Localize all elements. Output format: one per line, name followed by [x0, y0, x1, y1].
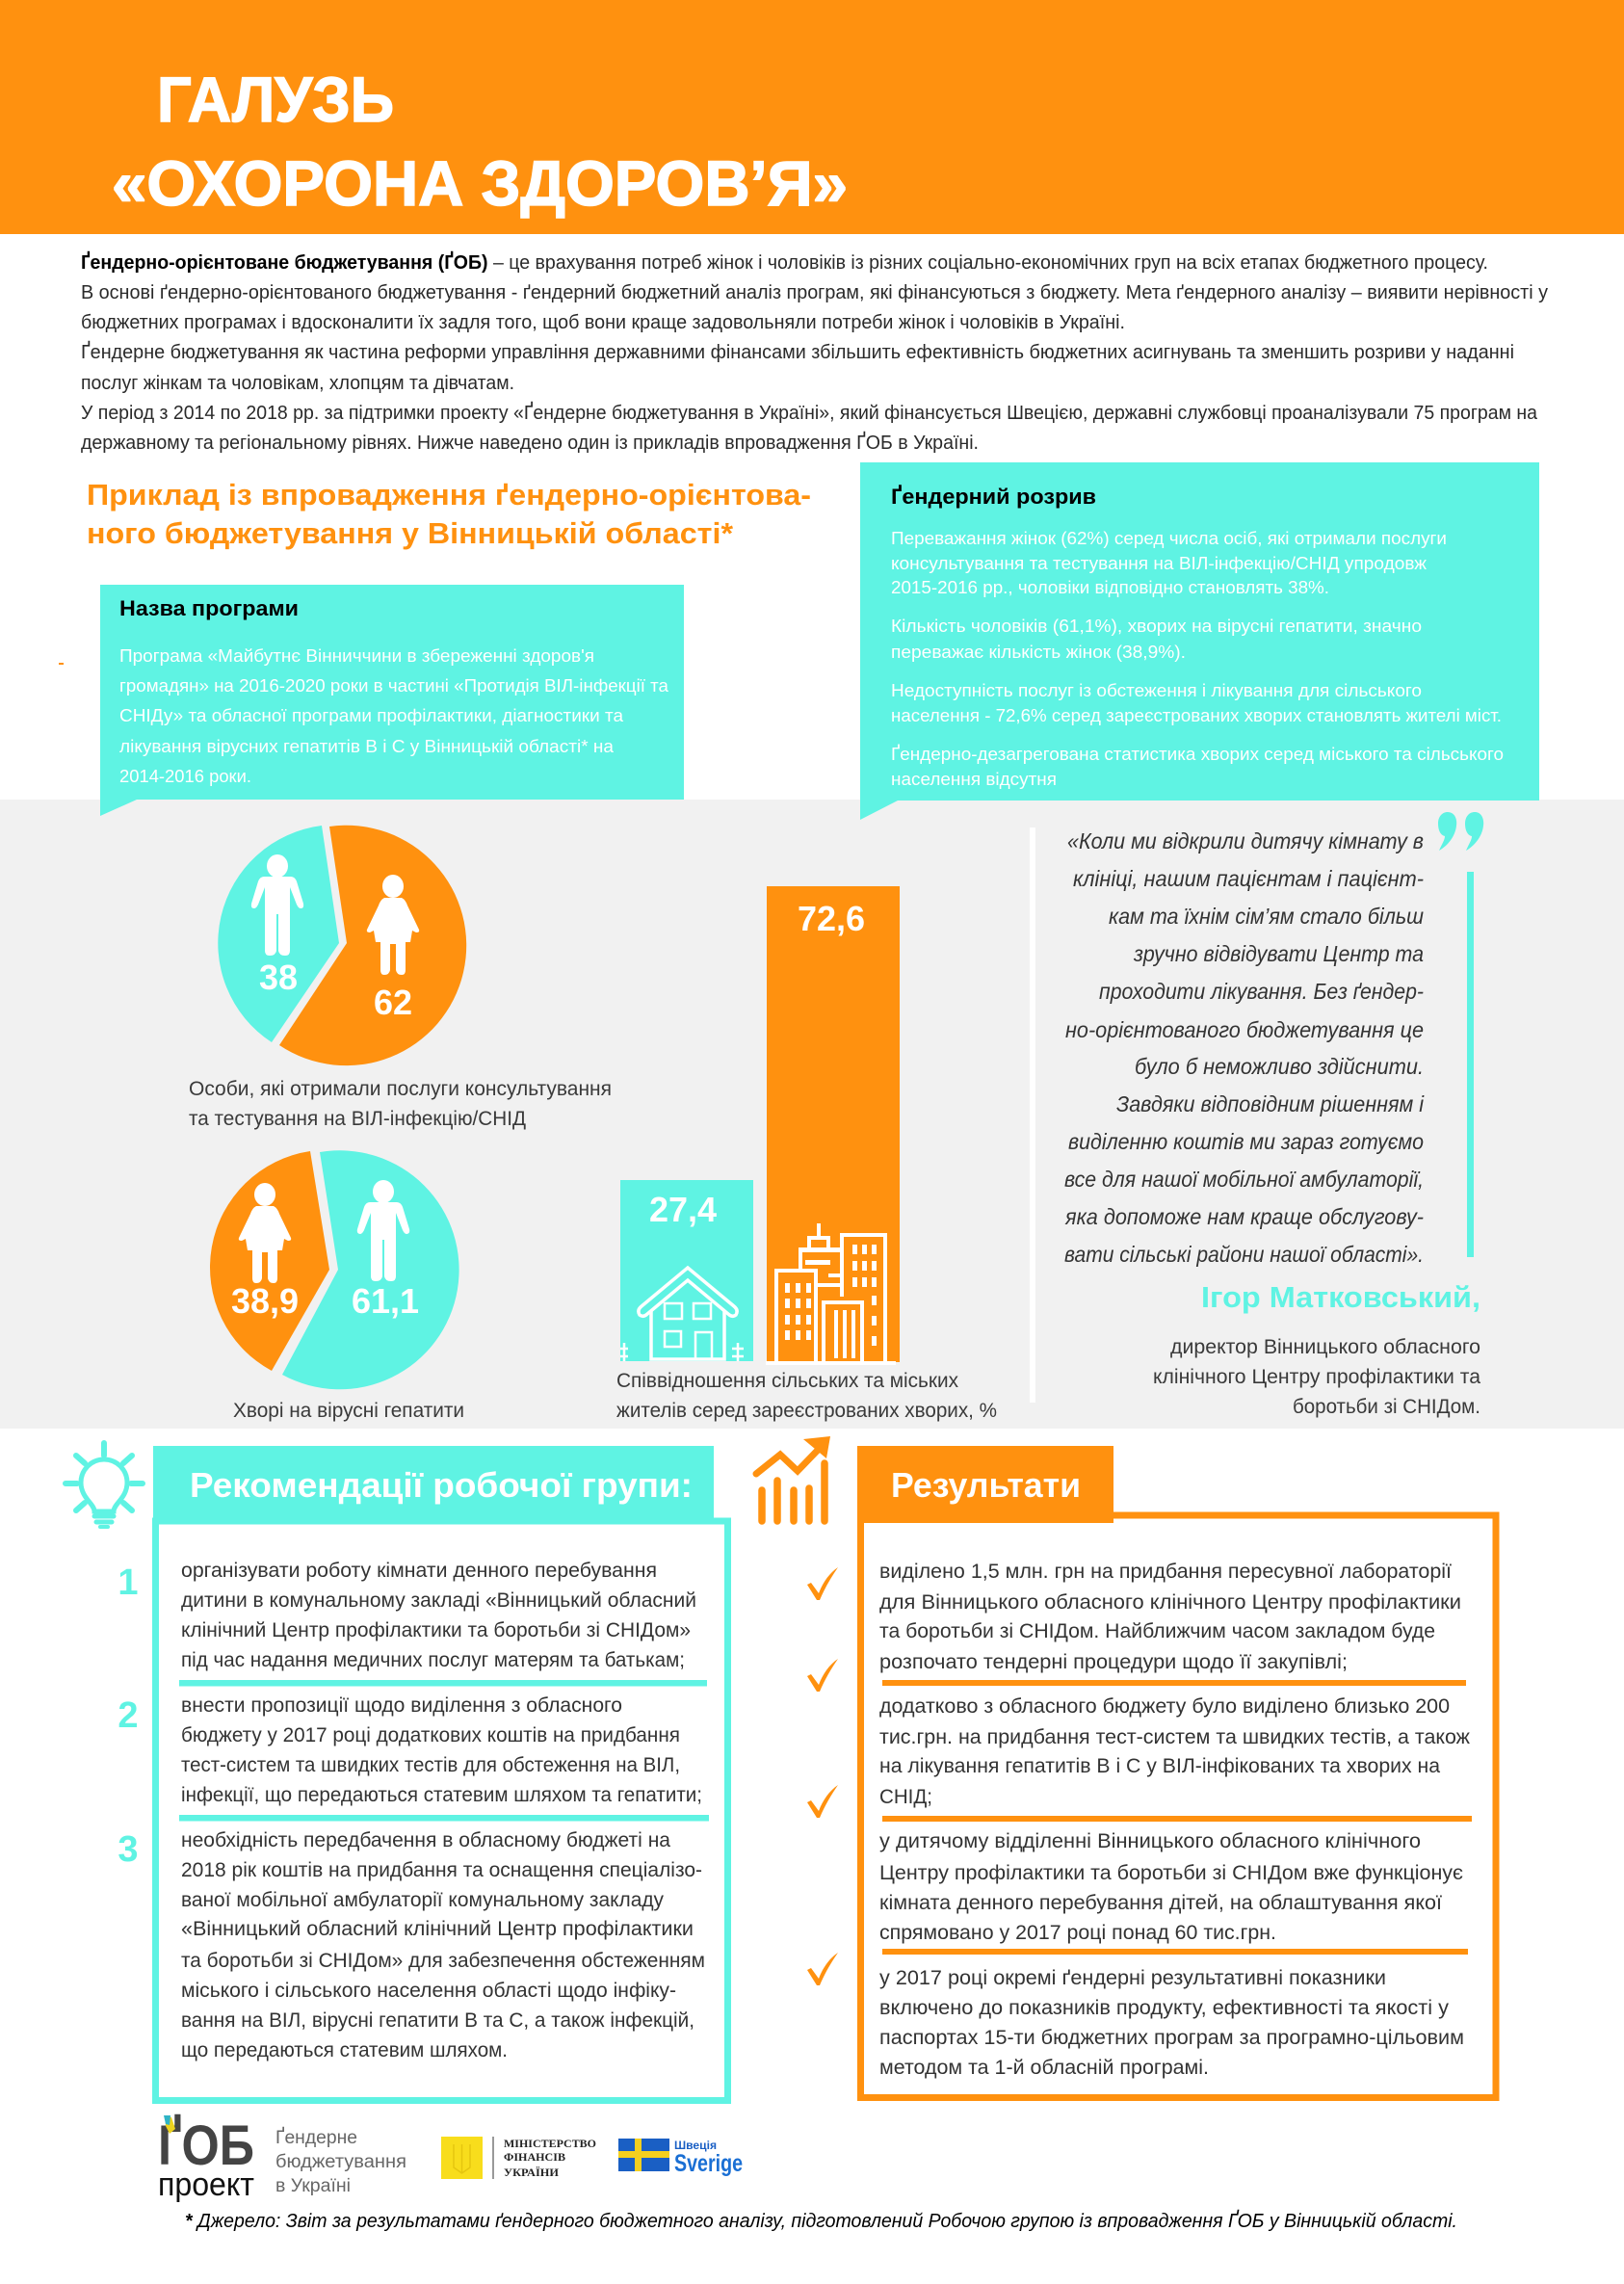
intro text block [81, 251, 1548, 454]
caption: hepatitis: Хворі на вірусні гепатити [233, 1400, 464, 1422]
caption: HIV services: та тестування на ВІЛ-інфекцію/СНІД [189, 1108, 526, 1130]
panel: programme name: СНІДу» та обласної програми профілактики, діагностики та [119, 705, 624, 725]
result 2: на лікування гепатитів В і С у ВІЛ-інфікованих та хворих на [879, 1755, 1440, 1777]
quote text: все для нашої мобільної амбулаторії, [1064, 1167, 1424, 1192]
author role [1153, 1336, 1480, 1418]
recommendation 3 [181, 1829, 705, 2061]
panel: gender gap: населення - 72,6% серед зареєстрованих хворих становлять жителі міст. [891, 705, 1502, 725]
number 2: 2 [118, 1695, 139, 1736]
result 3: Центру профілактики та боротьби зі СНІДом вже функціонує [879, 1862, 1463, 1884]
orange subheading: ного бюджетування у Вінницькій області* [87, 516, 734, 550]
result 3: у дитячому відділенні Вінницького обласного клінічного [879, 1830, 1421, 1852]
logo: ministry of finance: МІНІСТЕРСТВО [504, 2137, 596, 2150]
panel: programme name [100, 585, 684, 816]
logo: gender budgeting project: в Україні [275, 2176, 351, 2196]
heading: results [857, 1446, 1113, 1523]
number 1: 1 [118, 1562, 139, 1603]
result 1: для Вінницького обласного клінічного Центру профілактики [879, 1591, 1461, 1614]
result 4: включено до показників продукту, ефективності та якості у [879, 1997, 1450, 2019]
result 1: виділено 1,5 млн. грн на придбання пересувної лабораторії [879, 1561, 1452, 1583]
result 1 [879, 1561, 1461, 1673]
caption: rural vs urban [616, 1370, 997, 1422]
quote author: Ігор Матковський, [1201, 1280, 1480, 1314]
panel: gender gap: Кількість чоловіків (61,1%), хворих на вірусні гепатити, значно [891, 616, 1422, 636]
panel: gender gap [860, 462, 1539, 820]
logo: gender budgeting project [158, 2114, 406, 2203]
quote text: було б неможливо здійснити. [1135, 1054, 1424, 1079]
recommendation 3: «Вінницький обласний клінічний Центр профілактики [181, 1918, 694, 1940]
result 4 [879, 1967, 1464, 2079]
bar: rural [620, 1180, 753, 1361]
icon: man [357, 1180, 409, 1281]
recommendation 3: вання на ВІЛ, вірусні гепатити В та С, а також інфекцій, [181, 2009, 694, 2032]
panel: programme name: Назва програми [119, 596, 299, 620]
result 4: паспортах 15-ти бюджетних програм за програмно-цільовим [879, 2027, 1464, 2049]
icon: woman [239, 1183, 291, 1283]
logo: gender budgeting project: Ґендерне [275, 2127, 357, 2148]
recommendation 3: 2018 рік коштів на придбання та оснащення спеціалізо- [181, 1859, 702, 1881]
panel: gender gap: Переважання жінок (62%) серед числа осіб, які отримали послуги [891, 528, 1447, 548]
logo: Sweden [618, 2139, 743, 2177]
value: 62: 62 [374, 983, 412, 1022]
icon: light bulb [65, 1443, 143, 1527]
result 2: СНІД; [879, 1786, 932, 1808]
recommendation 3: міського і сільського населення області щодо інфіку- [181, 1980, 676, 2002]
small orange dot [59, 663, 64, 665]
logo: gender budgeting project: ҐОБ [158, 2114, 254, 2177]
quote text: вати сільські райони нашої області». [1064, 1242, 1424, 1267]
quote text: Завдяки відповідним рішенням і [1116, 1091, 1425, 1116]
quote text: клініці, нашим пацієнтам і пацієнт- [1073, 866, 1424, 891]
pie chart: hepatitis [210, 1150, 459, 1389]
icon: city buildings [766, 1223, 896, 1365]
intro text block: У період з 2014 по 2018 рр. за підтримки проекту «Ґендерне бюджетування в Україні», який фінансується Швецією, державні службовці проаналізували 75 програм на [81, 402, 1538, 424]
logo: gender budgeting project: бюджетування [275, 2152, 406, 2172]
icon: woman [367, 875, 419, 975]
intro text block: послуг жінкам та чоловікам, хлопцям та дівчатам. [81, 373, 514, 394]
recommendation 3: ваної мобільної амбулаторії комунальному закладу [181, 1889, 664, 1911]
value: 38,9: 38,9 [231, 1281, 299, 1321]
result 3: кімната денного перебування дітей, на облаштування якої [879, 1892, 1442, 1914]
intro text block: Ґендерне бюджетування як частина реформи управління державними фінансами збільшить ефективність бюджетних асигнувань та зменшить розриви у наданні [81, 341, 1514, 363]
recommendation 1: дитини в комунальному закладі «Вінницький обласний [181, 1589, 696, 1612]
icon: check marks [807, 1567, 838, 1985]
intro text block: державному та регіональному рівнях. Нижче наведено один із прикладів впровадження ҐОБ в Україні. [81, 432, 979, 454]
result 2 [879, 1695, 1470, 1808]
icon: growth chart [756, 1436, 830, 1521]
recommendation 3: необхідність передбачення в обласному бюджеті на [181, 1829, 670, 1851]
panel: gender gap: консультування та тестування на ВІЛ-інфекцію/СНІД упродовж [891, 553, 1428, 573]
quote text: но-орієнтованого бюджетування це [1065, 1017, 1424, 1042]
heading: recommendations [153, 1446, 714, 1524]
panel: gender gap: Недоступність послуг із обстеження і лікування для сільського [891, 680, 1422, 700]
intro text block: бюджетних програмах і вдосконалити їх задля того, щоб вони краще задовольняли потреби жінок і чоловіків в Україні. [81, 312, 1125, 333]
recommendation 2: бюджету у 2017 році додаткових коштів на придбання [181, 1724, 680, 1746]
panel: gender gap: Ґендерно-дезагрегована статистика хворих серед міського та сільського [891, 744, 1504, 764]
quote text: кам та їхнім сім’ям стало більш [1109, 904, 1424, 929]
panel: programme name: 2014-2016 роки. [119, 766, 251, 786]
heading: results: Результати [891, 1465, 1081, 1505]
recommendation 1: під час надання медичних послуг матерям та батькам; [181, 1649, 685, 1671]
result 2: додатково з обласного бюджету було виділено близько 200 [879, 1695, 1450, 1718]
value: 72,6: 72,6 [798, 899, 865, 938]
result 3 [879, 1830, 1463, 1944]
author role: боротьби зі СНІДом. [1293, 1396, 1480, 1418]
orange subheading: Приклад із впровадження ґендерно-орієнтова- [87, 478, 811, 512]
bar: urban [767, 886, 900, 1362]
caption: rural vs urban: жителів серед зареєстрованих хворих, % [616, 1400, 997, 1422]
quote text: «Коли ми відкрили дитячу кімнату в [1067, 828, 1424, 853]
panel: recommendations [153, 1446, 728, 2100]
author role: клінічного Центру профілактики та [1153, 1366, 1480, 1388]
result 4: у 2017 році окремі ґендерні результативні показники [879, 1967, 1386, 1989]
result 1: та боротьби зі СНІДом. Найближчим часом закладом буде [879, 1620, 1435, 1642]
value: 61,1: 61,1 [352, 1281, 419, 1321]
panel: programme name: лікування вірусних гепатитів В і С у Вінницькій області* на [119, 736, 615, 756]
quote text: проходити лікування. Без ґендер- [1099, 979, 1424, 1004]
icon: quotation mark [1438, 812, 1483, 851]
result 3: спрямовано у 2017 році понад 60 тис.грн. [879, 1922, 1276, 1944]
recommendation 2: тест-систем та швидких тестів для обстеження на ВІЛ, [181, 1754, 680, 1776]
recommendation 2: інфекції, що передаються статевим шляхом та гепатити; [181, 1784, 702, 1806]
recommendation 2: внести пропозиції щодо виділення з обласного [181, 1694, 622, 1717]
footnote: * Джерело: Звіт за результатами ґендерного бюджетного аналізу, підготовлений Робочою групою із впровадження ҐОБ у Вінницькій області. [185, 2210, 1457, 2232]
bar chart: rural vs urban [620, 886, 900, 1365]
result 1: розпочато тендерні процедури щодо її закупівлі; [879, 1651, 1348, 1673]
quote text: яка допоможе нам краще обслугову- [1064, 1204, 1424, 1229]
value: 27,4: 27,4 [649, 1190, 717, 1229]
caption: HIV services: Особи, які отримали послуги консультування [189, 1078, 612, 1100]
number 3: 3 [118, 1829, 139, 1870]
intro text block: В основі ґендерно-орієнтованого бюджетування - ґендерний бюджетний аналіз програм, які фінансуються з бюджету. Мета ґендерного аналізу – виявити нерівності у [81, 282, 1548, 303]
panel: gender gap: населення відсутня [891, 769, 1057, 789]
author role: директор Вінницького обласного [1170, 1336, 1480, 1358]
icon: house [620, 1268, 744, 1361]
pie chart: HIV services [218, 826, 466, 1065]
heading: recommendations: Рекомендації робочої групи: [190, 1465, 693, 1505]
result 2: тис.грн. на придбання тест-систем та швидких тестів, а також [879, 1726, 1470, 1748]
caption: HIV services [189, 1078, 612, 1130]
logo: ministry of finance: УКРАЇНИ [504, 2166, 560, 2179]
intro text block: Ґендерно-орієнтоване бюджетування (ҐОБ) – це врахування потреб жінок і чоловіків із різних соціально-економічних груп на всіх етапах бюджетного процесу. [81, 251, 1488, 274]
result 4: методом та 1-й обласній програмі. [879, 2057, 1209, 2079]
caption: rural vs urban: Співвідношення сільських та міських [616, 1370, 958, 1392]
white divider [1030, 827, 1035, 1403]
value: 38: 38 [259, 958, 298, 997]
orange subheading [87, 478, 811, 550]
recommendation 3: що передаються статевим шляхом. [181, 2039, 508, 2061]
quote text: виділенню коштів ми зараз готуємо [1068, 1129, 1424, 1154]
panel: gender gap: переважає кількість жінок (38,9%). [891, 642, 1186, 662]
title banner: ГАЛУЗЬ [157, 64, 394, 135]
recommendation 3: та боротьби зі СНІДом» для забезпечення обстеженням [181, 1950, 705, 1972]
logo: Sweden: Швеція [674, 2139, 717, 2152]
panel: gender gap: 2015-2016 рр., чоловіки відповідно становлять 38%. [891, 577, 1329, 597]
title banner [0, 0, 1624, 234]
logo: ministry of finance [441, 2137, 596, 2179]
title banner: «ОХОРОНА ЗДОРОВ’Я» [112, 147, 848, 219]
icon: man [251, 854, 303, 956]
grey band background [0, 800, 1624, 1429]
teal quote bar [1467, 872, 1474, 1257]
recommendation 1: клінічний Центр профілактики та боротьби зі СНІДом» [181, 1619, 691, 1641]
quote text: зручно відвідувати Центр та [1133, 941, 1424, 966]
logo: ministry of finance: ФІНАНСІВ [504, 2150, 565, 2164]
recommendation 1: організувати роботу кімнати денного перебування [181, 1560, 657, 1582]
panel: programme name: громадян» на 2016-2020 роки в частині «Протидія ВІЛ-інфекції та [119, 675, 669, 696]
logo: Sweden: Sverige [674, 2150, 743, 2177]
panel: gender gap: Ґендерний розрив [891, 485, 1096, 509]
logo: gender budgeting project: проект [158, 2166, 254, 2203]
recommendation 2 [181, 1694, 702, 1806]
recommendation 1 [181, 1560, 696, 1671]
panel: programme name: Програма «Майбутнє Вінниччини в збереженні здоров'я [119, 645, 594, 666]
quote text [1064, 828, 1425, 1267]
panel: results [857, 1446, 1496, 2098]
